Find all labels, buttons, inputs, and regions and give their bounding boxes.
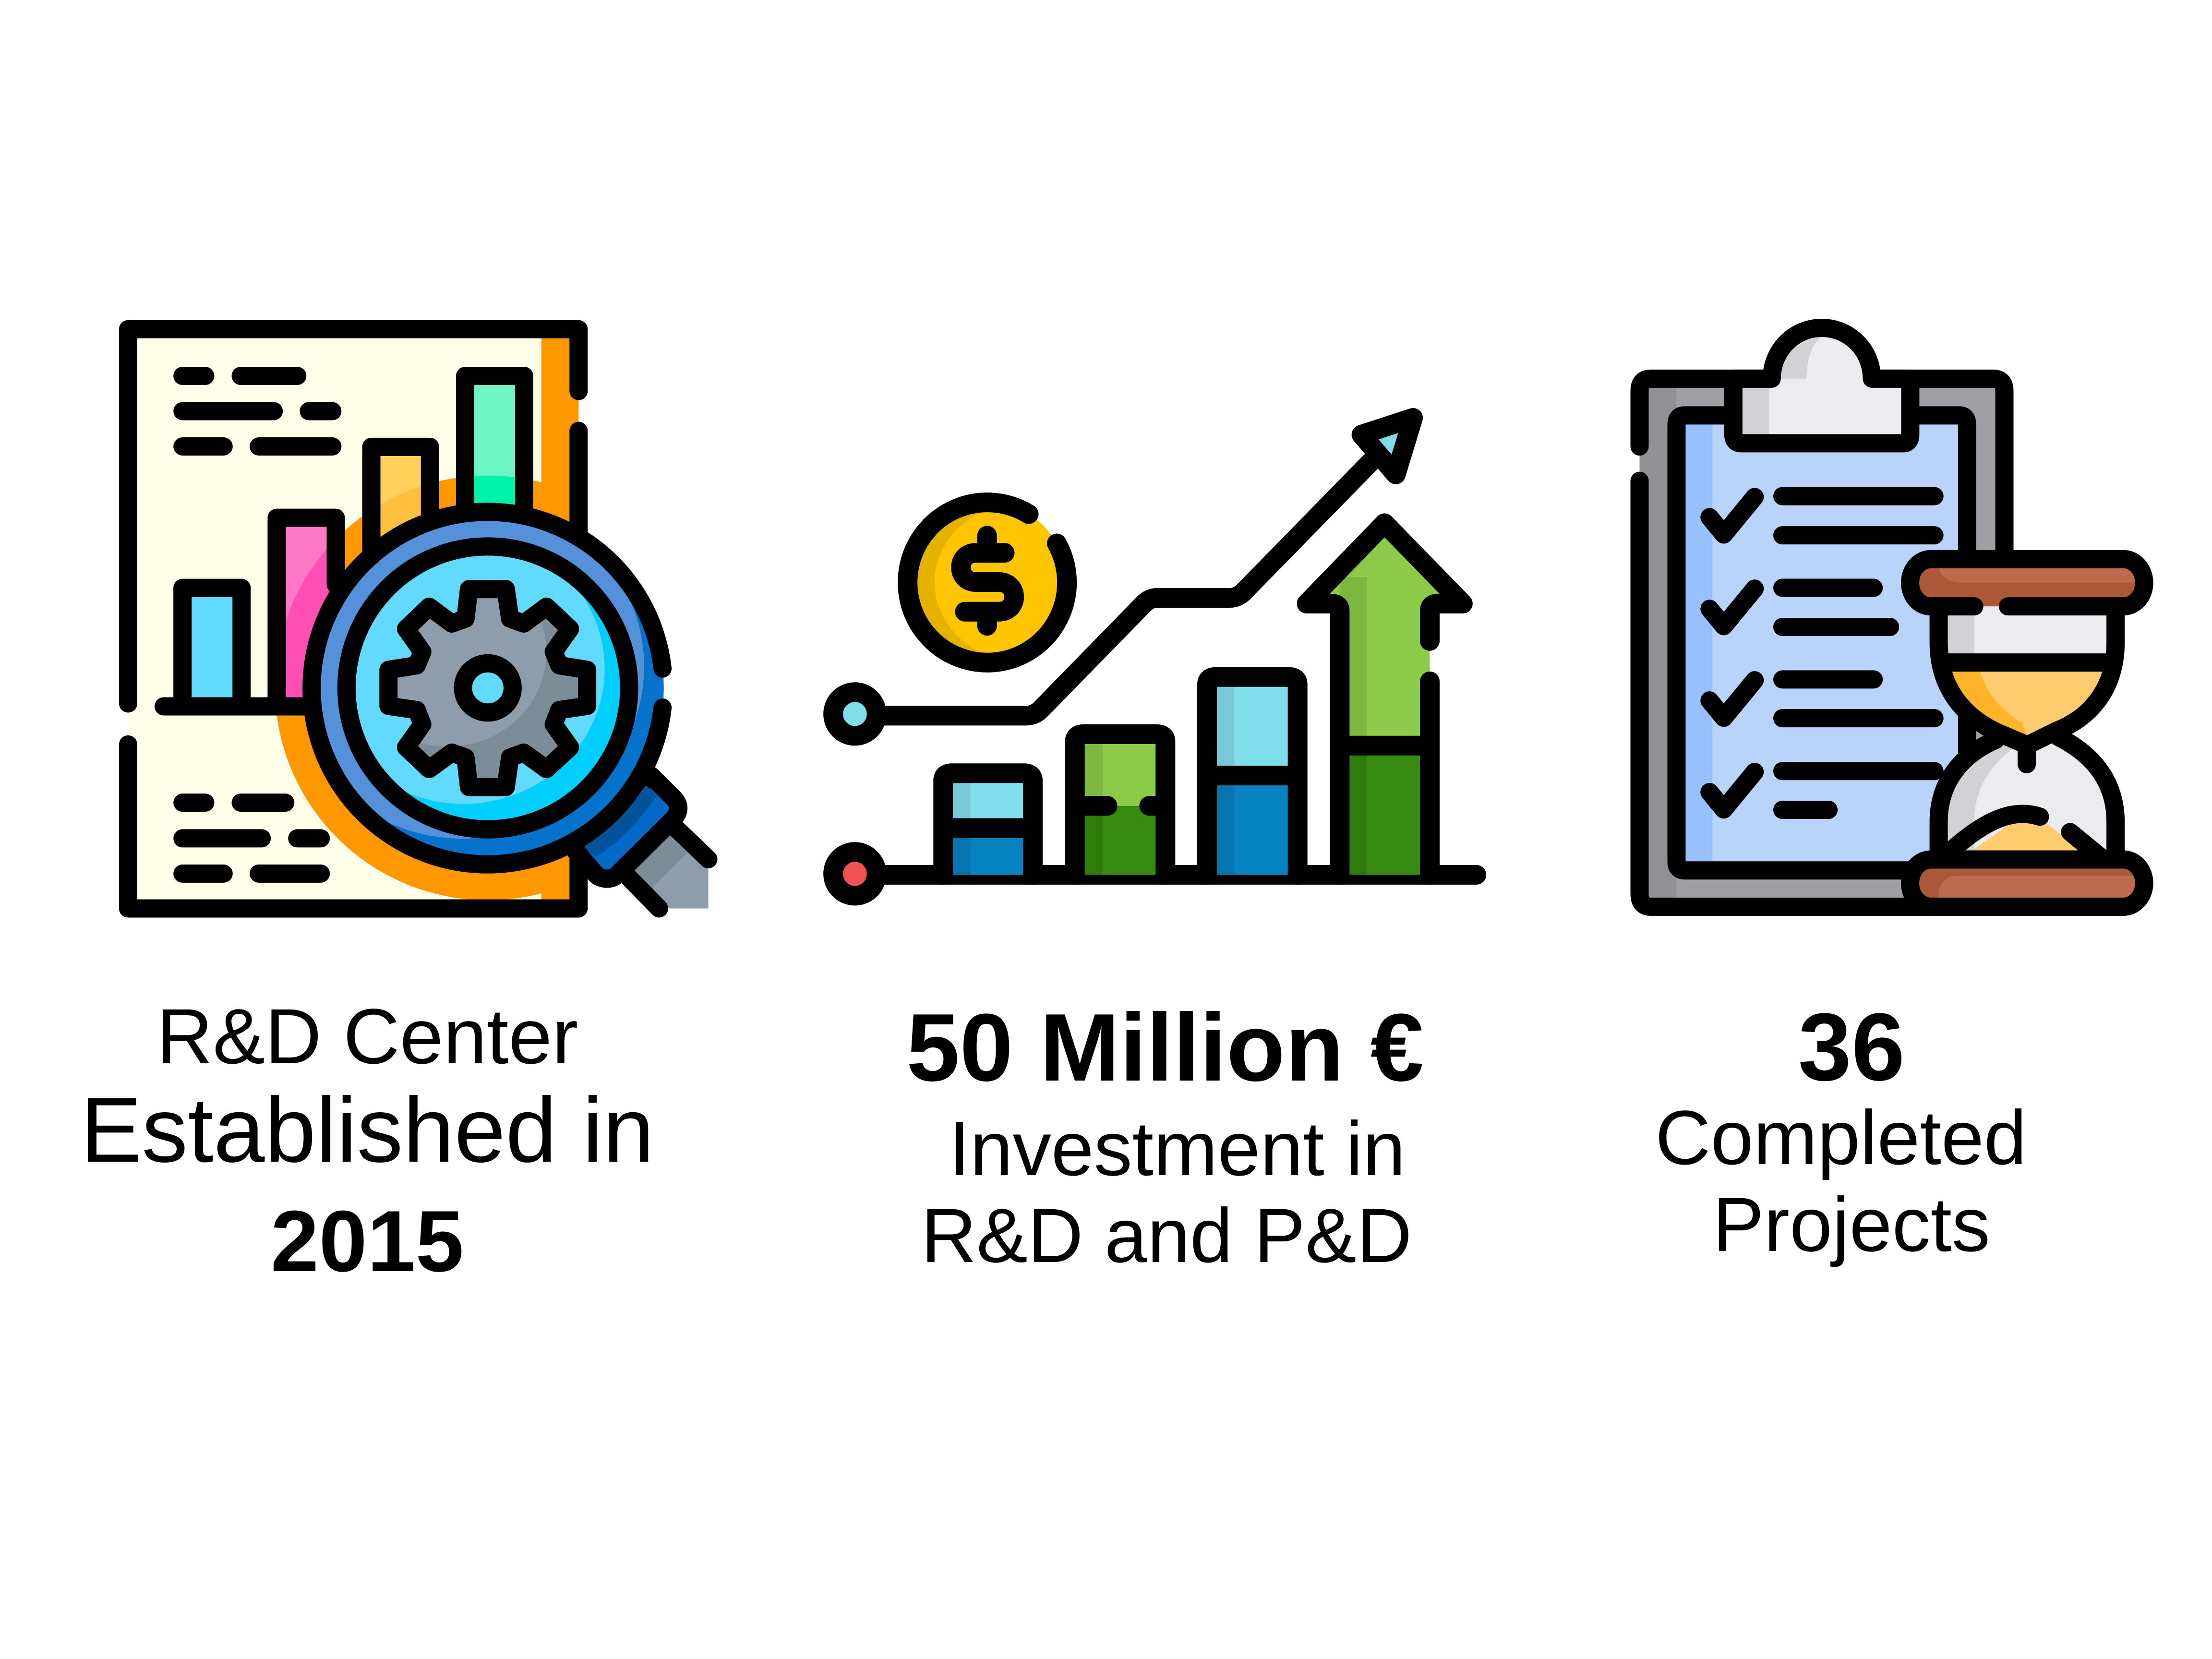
checklist lines (1782, 496, 1935, 810)
document page (119, 320, 588, 918)
icon: investment growth chart (833, 418, 1477, 896)
hourglass upper bulb (1939, 606, 2116, 745)
text: R&D Center: R&D Center (156, 992, 578, 1080)
text: 2015: 2015 (271, 1193, 464, 1290)
icon: hourglass (1910, 550, 2159, 912)
icon: gear (379, 580, 596, 796)
bar 1 (943, 773, 1033, 875)
text: 50 Million euro: 50 Million € (906, 994, 1424, 1101)
bar 4 rising arrow (1307, 523, 1463, 875)
hourglass bottom cap (1910, 859, 2159, 912)
text block: R&D center established (80, 992, 654, 1290)
text: Completed: Completed (1655, 1094, 2027, 1180)
text: Established in: Established in (80, 1078, 654, 1181)
clipboard board (1640, 379, 2005, 907)
baseline with end node (833, 852, 1477, 896)
bar 2 (1075, 734, 1166, 875)
checklist ticks (1709, 497, 1755, 809)
magnifier handle (576, 775, 709, 908)
text block: completed projects (1655, 994, 2027, 1267)
clipboard paper (1676, 415, 1967, 870)
magnifier lens ring (284, 494, 664, 865)
text: R&D and P&D: R&D and P&D (921, 1192, 1412, 1278)
magnifier glass (322, 533, 629, 830)
text: Investment in: Investment in (949, 1106, 1406, 1191)
icon: clipboard checklist with hourglass (1640, 328, 2159, 912)
bar 3 (1207, 677, 1298, 875)
hourglass top cap (1910, 550, 2159, 606)
trend line with start node and arrowhead (833, 418, 1413, 736)
icon: dollar coin (907, 502, 1113, 662)
bar chart on document (164, 376, 524, 706)
text lines on document (182, 376, 332, 874)
clipboard clip (1733, 328, 1910, 443)
hourglass lower bulb (1939, 737, 2116, 859)
text: 36: 36 (1798, 994, 1905, 1101)
text: Projects: Projects (1713, 1181, 1990, 1267)
icon: research document with magnifying glass (128, 329, 709, 908)
text block: investment (906, 994, 1424, 1278)
